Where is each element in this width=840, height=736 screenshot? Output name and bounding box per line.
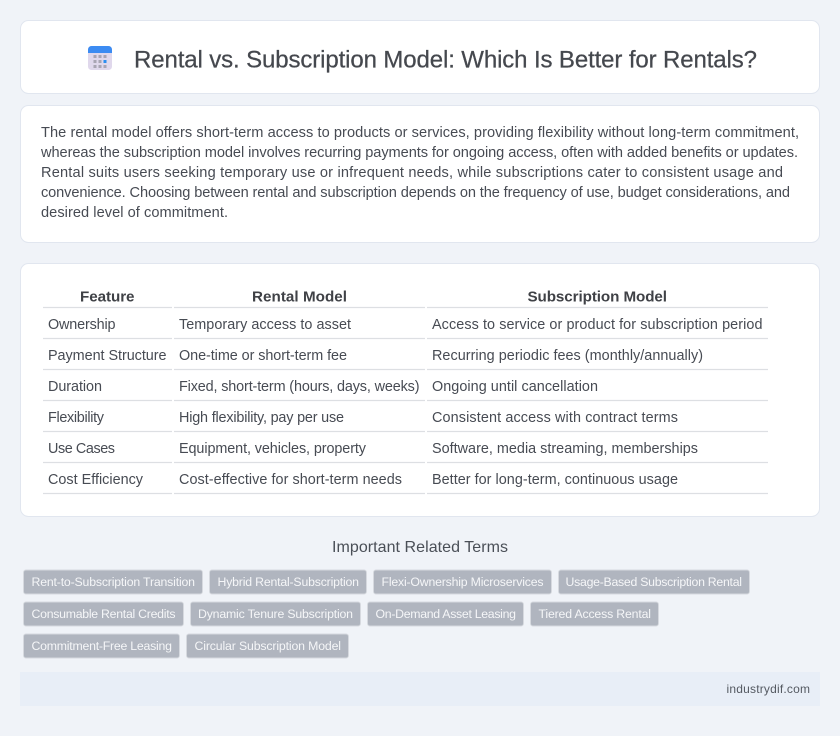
- panel: comparison table: [20, 264, 820, 516]
- tag: Tiered Access Rental: [538, 607, 651, 621]
- tag: [190, 602, 360, 626]
- row: ownership: Access to service or product for subscription period: [432, 317, 762, 333]
- row: duration: Ongoing until cancellation: [432, 379, 598, 395]
- heading: important related terms: Important Related Terms: [332, 539, 508, 556]
- tag: Usage-Based Subscription Rental: [566, 575, 742, 589]
- panel: introduction text: whereas the subscription model involves recurring payments for ongoing access, often with added benefits or updates.: [40, 145, 798, 161]
- row: ownership: Temporary access to asset: [179, 317, 351, 333]
- row: cost efficiency: Cost-effective for short-term needs: [179, 472, 402, 488]
- tag: [374, 570, 552, 594]
- row: cost efficiency: Better for long-term, continuous usage: [432, 472, 678, 488]
- tag: Consumable Rental Credits: [32, 607, 176, 621]
- panel: introduction text: The rental model offers short-term access to products or services, providing flexibility without long-term commitment,: [41, 125, 799, 141]
- row: duration: [43, 379, 768, 400]
- row: payment structure: Payment Structure: [48, 348, 166, 364]
- panel: related term tags: [24, 570, 750, 658]
- row: use cases: Software, media streaming, memberships: [432, 441, 698, 457]
- table header row: Rental Model: [252, 288, 347, 306]
- title: Rental vs. Subscription Model: Which Is Better for Rentals?: [134, 46, 757, 74]
- row: use cases: [43, 441, 768, 462]
- tag: [530, 602, 658, 626]
- tag: [24, 602, 184, 626]
- panel: introduction text: [20, 106, 820, 242]
- table header row: [43, 288, 768, 308]
- row: payment structure: One-time or short-term fee: [179, 348, 347, 364]
- panel: introduction text: desired level of commitment.: [41, 205, 228, 221]
- icon: calendar: [88, 46, 112, 70]
- row: flexibility: Flexibility: [48, 410, 105, 426]
- tag: Dynamic Tenure Subscription: [198, 607, 353, 621]
- row: duration: Duration: [48, 379, 102, 395]
- row: cost efficiency: Cost Efficiency: [48, 472, 144, 488]
- panel: introduction text: convenience. Choosing between rental and subscription depends on the frequency of use, budget considerations, and: [41, 185, 790, 201]
- row: use cases: Use Cases: [48, 441, 115, 457]
- tag: Rent-to-Subscription Transition: [32, 575, 195, 589]
- row: payment structure: Recurring periodic fees (monthly/annually): [432, 348, 703, 364]
- row: duration: Fixed, short-term (hours, days, weeks): [179, 379, 420, 395]
- row: flexibility: Consistent access with contract terms: [432, 410, 678, 426]
- tag: [558, 570, 750, 594]
- tag: [24, 634, 180, 658]
- row: cost efficiency: [43, 472, 768, 494]
- tag: Hybrid Rental-Subscription: [218, 575, 359, 589]
- panel: introduction text: Rental suits users seeking temporary use or infrequent needs, while subscriptions cater to consistent usage and: [41, 165, 783, 181]
- tag: [368, 602, 524, 626]
- tag: On-Demand Asset Leasing: [376, 607, 516, 621]
- row: ownership: [43, 317, 768, 338]
- tag: Flexi-Ownership Microservices: [382, 575, 544, 589]
- tag: [186, 634, 348, 658]
- footer: industrydif.com: [726, 682, 810, 696]
- row: flexibility: [43, 410, 768, 432]
- row: use cases: Equipment, vehicles, property: [179, 441, 367, 457]
- tag: Circular Subscription Model: [194, 639, 341, 653]
- row: payment structure: [43, 348, 768, 370]
- tag: [210, 570, 366, 594]
- table header row: Feature: [80, 288, 134, 306]
- tag: [24, 570, 202, 594]
- row: ownership: Ownership: [48, 317, 116, 333]
- header panel: [20, 20, 820, 94]
- tag: Commitment-Free Leasing: [32, 639, 172, 653]
- table header row: Subscription Model: [528, 288, 667, 306]
- footer: [20, 672, 820, 706]
- row: flexibility: High flexibility, pay per use: [179, 410, 344, 426]
